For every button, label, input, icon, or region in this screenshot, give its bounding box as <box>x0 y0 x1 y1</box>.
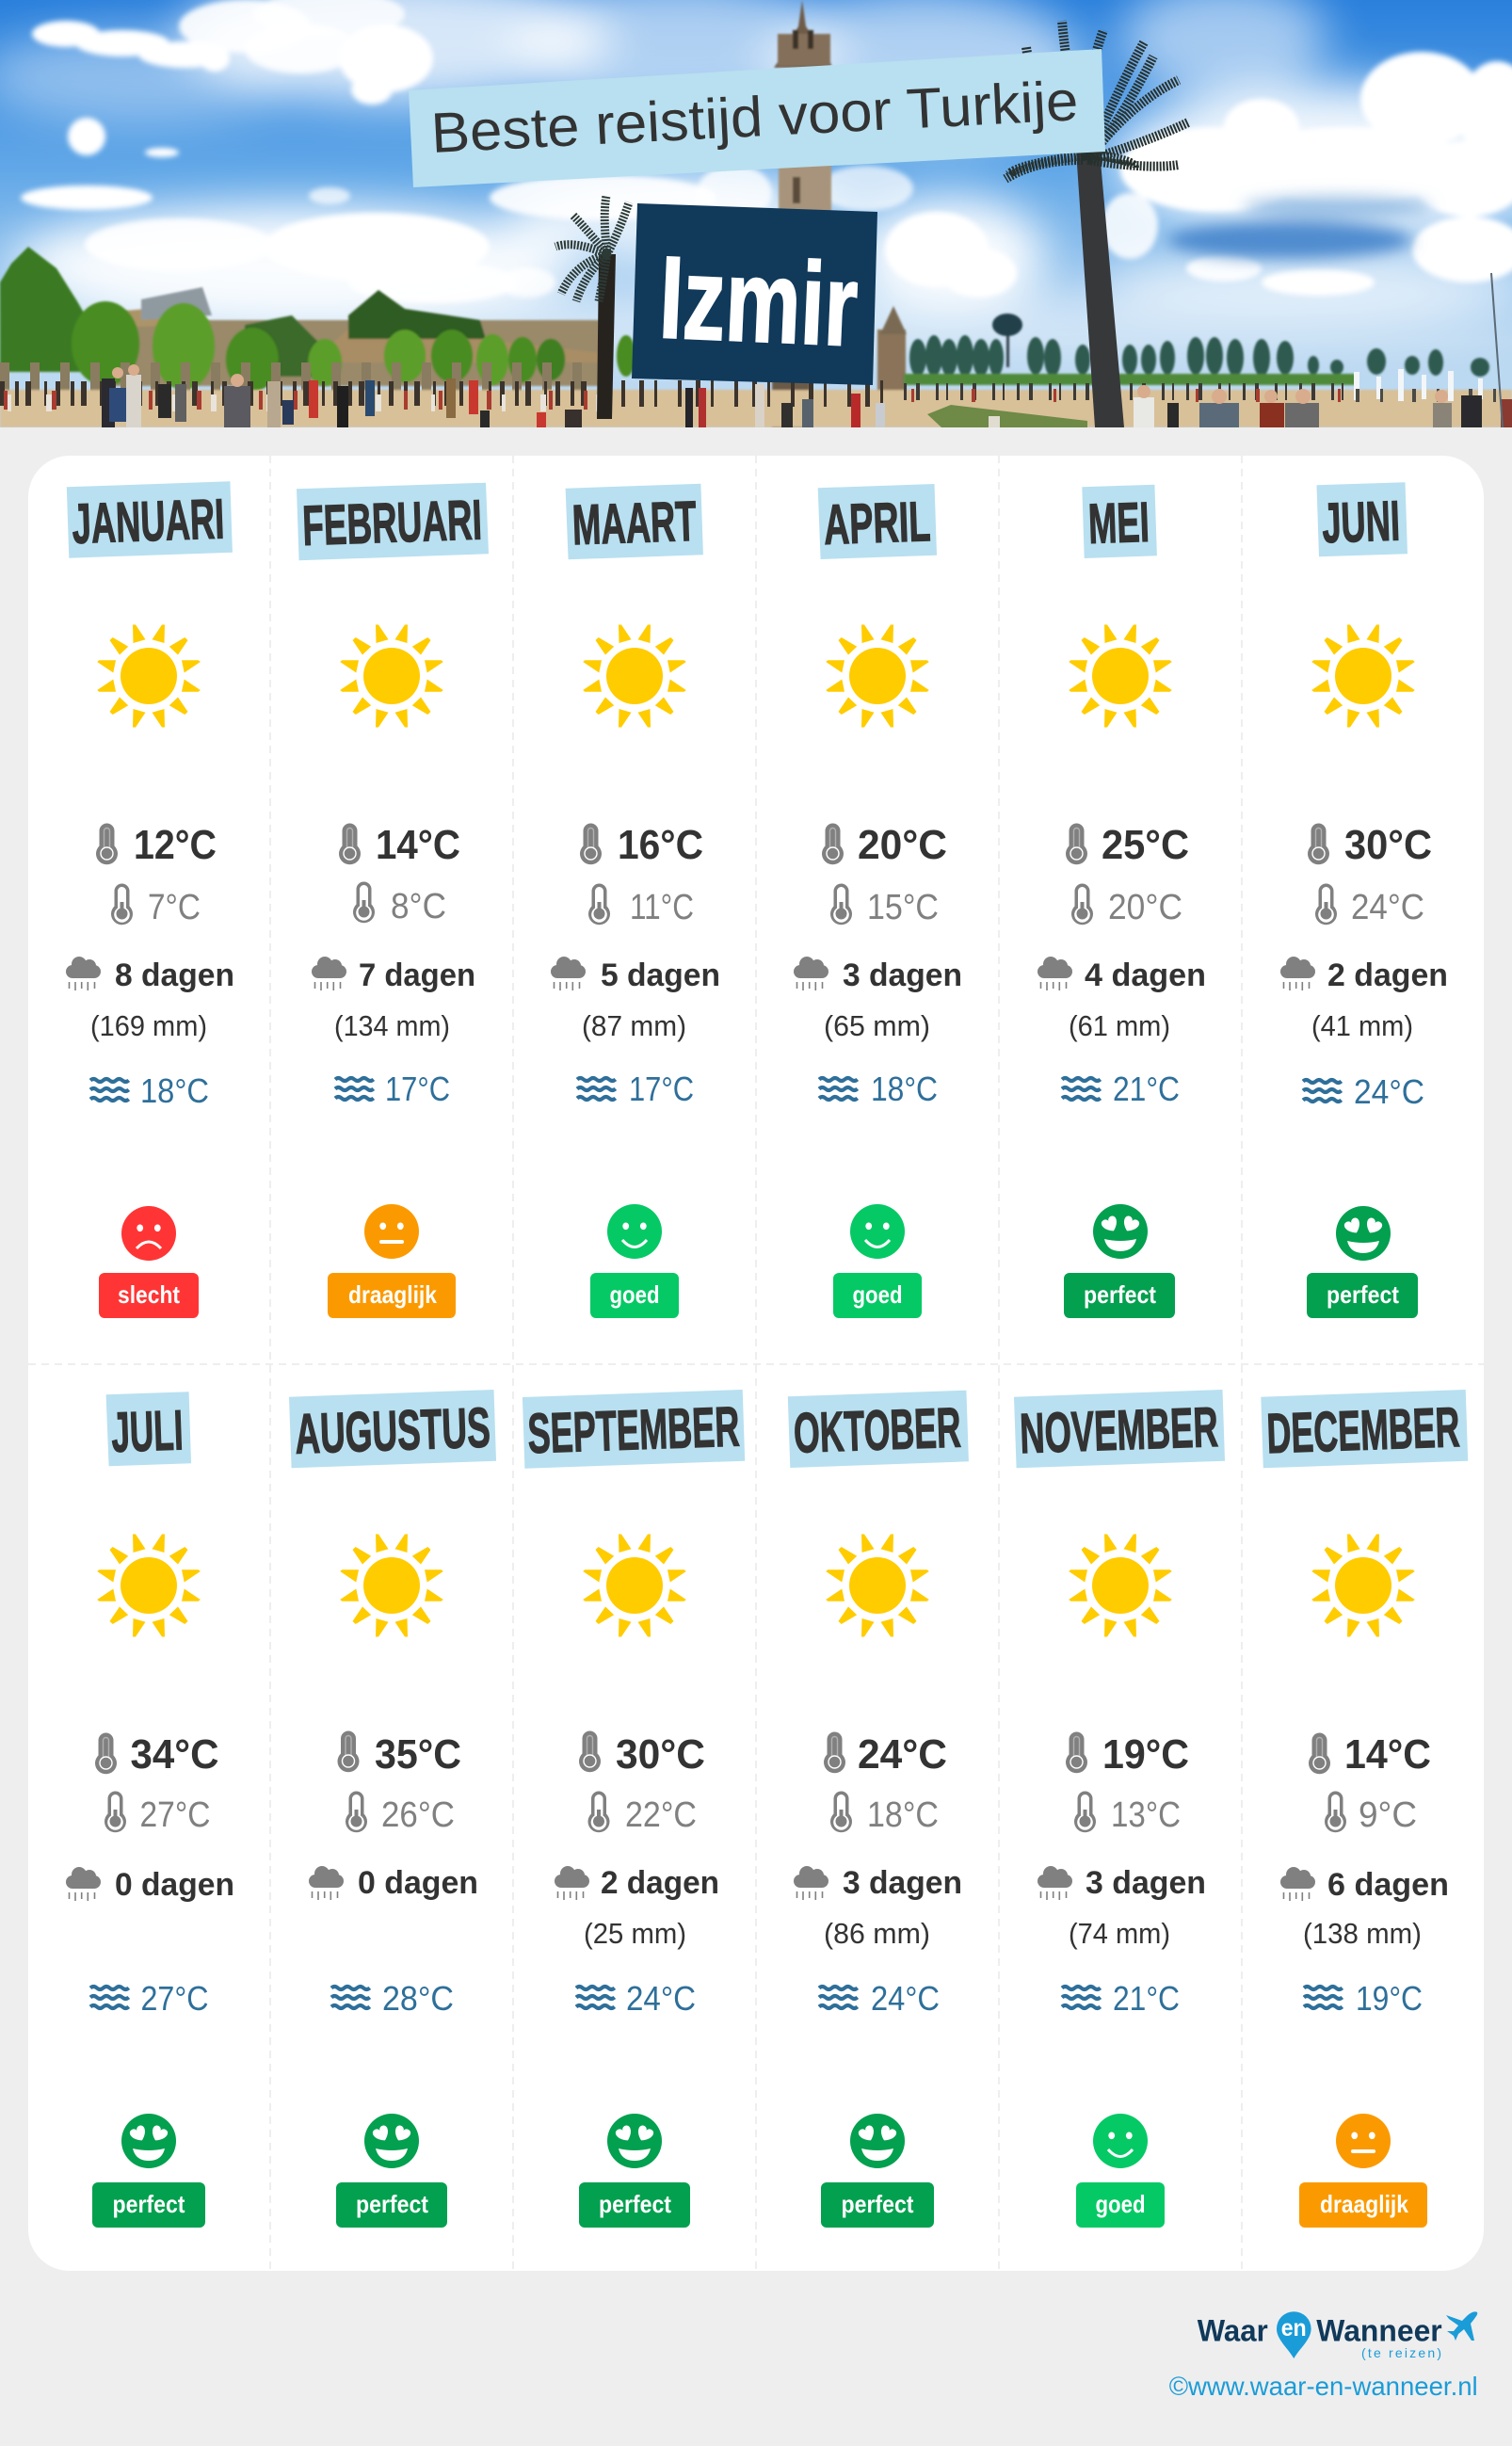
rating: perfect <box>1307 1206 1418 1318</box>
sea temperature: 27°C <box>141 1979 209 2018</box>
min temperature <box>1315 883 1424 927</box>
panel: september <box>523 1390 745 2228</box>
month label: juni <box>1316 482 1407 556</box>
rating: perfect: perfect <box>356 2190 428 2218</box>
min temperature <box>587 1791 697 1835</box>
panel: juli <box>66 1392 234 2228</box>
max temperature: 30°C <box>616 1731 705 1778</box>
month label: april: APRIL <box>823 490 931 556</box>
rain days: 0 dagen <box>115 1867 234 1903</box>
max temperature: 12°C <box>134 822 217 868</box>
month label: maart: MAART <box>571 490 698 556</box>
min temperature <box>830 883 939 927</box>
sea temperature: 18°C <box>140 1071 209 1110</box>
max temperature: 25°C <box>1102 822 1189 868</box>
rainfall: (86 mm) <box>824 1917 930 1950</box>
banner: title <box>409 49 1105 187</box>
rain days: 2 dagen <box>601 1865 719 1901</box>
sea temperature <box>1062 1979 1180 2018</box>
month label: november <box>1014 1390 1225 1468</box>
min temperature: 20°C <box>1108 888 1182 927</box>
max temperature <box>580 822 703 868</box>
panel: maart <box>551 484 720 1318</box>
icon: sun <box>1069 625 1172 727</box>
rating: perfect <box>92 2114 205 2228</box>
icon: plane <box>1446 2311 1477 2341</box>
logo: Waar en Wanneer <box>1198 2311 1477 2360</box>
min temperature: 7°C <box>148 888 201 927</box>
min temperature <box>1325 1791 1417 1835</box>
panel: februari <box>297 483 489 1318</box>
min temperature: 15°C <box>867 888 939 927</box>
rainfall: (169 mm) <box>90 1009 207 1042</box>
panel: calendar card <box>28 456 1484 2271</box>
max temperature: 24°C <box>858 1731 947 1778</box>
sea temperature <box>577 1070 694 1108</box>
rating: slecht: slecht <box>118 1280 180 1309</box>
rating: perfect <box>1064 1204 1175 1318</box>
icon: sun <box>97 1535 201 1636</box>
month label: mei <box>1082 485 1157 558</box>
min temperature: 11°C <box>630 888 694 927</box>
month label: juni: JUNI <box>1321 489 1401 555</box>
month label: februari: FEBRUARI <box>301 488 483 557</box>
sea temperature: 17°C <box>385 1070 450 1108</box>
icon: sun <box>1311 625 1415 727</box>
rain days: 2 dagen <box>1327 957 1448 993</box>
max temperature: 14°C <box>376 822 460 868</box>
min temperature <box>105 1791 211 1835</box>
panel: juni <box>1280 482 1448 1318</box>
sea temperature <box>819 1070 938 1108</box>
banner: city name <box>632 203 877 385</box>
month label: februari <box>297 483 489 560</box>
max temperature: 19°C <box>1102 1731 1189 1778</box>
rating: perfect <box>579 2114 690 2228</box>
max temperature <box>1066 1731 1189 1778</box>
rainfall: (134 mm) <box>334 1009 450 1042</box>
icon: map pin: en <box>1281 2315 1307 2341</box>
month label: januari: JANUARI <box>71 487 225 555</box>
min temperature: 13°C <box>1111 1795 1181 1835</box>
rain days: 3 dagen <box>1086 1865 1206 1901</box>
rain days: 5 dagen <box>601 957 720 993</box>
max temperature <box>579 1730 705 1778</box>
max temperature <box>339 822 460 868</box>
min temperature: 27°C <box>139 1795 211 1835</box>
sea temperature: 21°C <box>1113 1979 1180 2018</box>
sea temperature <box>1303 1072 1424 1111</box>
tagline: (te reizen) <box>1361 2345 1441 2360</box>
rain days: 0 dagen <box>358 1865 478 1901</box>
header photo: Izmir clock tower square <box>0 0 1512 427</box>
max temperature <box>1308 822 1432 868</box>
panel: mei <box>1037 485 1206 1318</box>
max temperature: 14°C <box>1344 1731 1431 1778</box>
rating: goed <box>590 1204 679 1318</box>
icon: map pin <box>1277 2311 1311 2358</box>
rain days <box>1037 957 1206 993</box>
sea temperature <box>1062 1070 1180 1108</box>
month label: juli <box>106 1392 191 1466</box>
rain days: 3 dagen <box>843 957 962 993</box>
rain days <box>551 957 720 993</box>
rain days <box>66 957 234 993</box>
rating: slecht <box>99 1206 199 1318</box>
icon: sun <box>1069 1535 1172 1636</box>
rainfall: (138 mm) <box>1303 1917 1422 1950</box>
month label: november: NOVEMBER <box>1019 1395 1219 1465</box>
min temperature: 8°C <box>391 887 446 926</box>
sea temperature <box>335 1070 450 1108</box>
min temperature <box>1074 1791 1181 1835</box>
month label: augustus: AUGUSTUS <box>294 1395 491 1466</box>
month label: augustus <box>289 1390 496 1468</box>
sea temperature <box>819 1979 940 2018</box>
rainfall: (61 mm) <box>1069 1009 1170 1042</box>
max temperature: 30°C <box>1344 822 1432 868</box>
icon: sun <box>583 625 686 727</box>
sea temperature <box>90 1979 209 2018</box>
max temperature <box>1066 822 1189 868</box>
sea temperature <box>1304 1979 1423 2018</box>
min temperature <box>111 883 201 927</box>
icon: sun <box>340 625 443 727</box>
rainfall: (65 mm) <box>824 1009 930 1042</box>
min temperature <box>353 881 446 926</box>
min temperature: 24°C <box>1351 888 1424 927</box>
min temperature <box>346 1791 455 1835</box>
sea temperature: 21°C <box>1113 1070 1180 1108</box>
title text: Beste reistijd voor Turkije <box>429 69 1080 165</box>
rating: perfect <box>821 2114 934 2228</box>
rain days: 7 dagen <box>359 957 475 993</box>
sea temperature: 24°C <box>871 1979 940 2018</box>
month label: juli: JULI <box>110 1398 185 1464</box>
rain days <box>794 957 962 993</box>
min temperature <box>1071 883 1182 927</box>
sea temperature: 19°C <box>1356 1979 1423 2018</box>
rating: perfect: perfect <box>113 2190 185 2218</box>
max temperature <box>96 822 217 868</box>
min temperature: 26°C <box>381 1795 455 1835</box>
rating: draaglijk: draaglijk <box>1320 2190 1408 2218</box>
rating: goed: goed <box>610 1280 659 1309</box>
month label: januari <box>67 481 233 558</box>
month label: maart <box>566 484 703 559</box>
panel: december <box>1261 1390 1468 2228</box>
max temperature <box>822 822 947 868</box>
max temperature: 34°C <box>130 1731 218 1778</box>
rating: draaglijk <box>328 1204 456 1318</box>
rating: perfect: perfect <box>599 2190 671 2218</box>
panel: oktober <box>788 1391 969 2228</box>
panel: augustus <box>289 1390 496 2228</box>
month label: september <box>523 1390 745 1469</box>
icon: sun <box>340 1535 443 1636</box>
rain days <box>312 957 475 993</box>
max temperature: 35°C <box>375 1731 461 1778</box>
panel: april <box>794 484 962 1318</box>
min temperature <box>830 1791 939 1835</box>
rainfall: (41 mm) <box>1311 1009 1413 1042</box>
rating: perfect <box>336 2114 447 2228</box>
min temperature: 22°C <box>625 1795 697 1835</box>
rating: goed: goed <box>1096 2190 1145 2218</box>
rating: draaglijk: draaglijk <box>348 1280 437 1309</box>
icon: sun <box>97 625 201 727</box>
logo: Waar en Wanneer: Wanneer <box>1316 2314 1442 2348</box>
min temperature: 9°C <box>1359 1795 1417 1835</box>
sea temperature: 17°C <box>629 1070 694 1108</box>
city name text: Izmir <box>657 233 861 371</box>
month label: oktober: OKTOBER <box>793 1396 962 1465</box>
icon: sun <box>826 1535 929 1636</box>
max temperature: 20°C <box>858 822 947 868</box>
website url: ©www.waar-en-wanneer.nl <box>1169 2372 1478 2401</box>
rating: goed: goed <box>853 1280 902 1309</box>
month label: oktober <box>788 1391 969 1468</box>
month label: september: SEPTEMBER <box>526 1394 741 1465</box>
min temperature <box>588 883 694 927</box>
icon: sun <box>583 1535 686 1636</box>
sea temperature <box>90 1071 209 1110</box>
sea temperature: 28°C <box>382 1979 454 2018</box>
rating: goed <box>1076 2114 1165 2228</box>
rain days: 4 dagen <box>1085 957 1206 993</box>
max temperature <box>337 1730 461 1778</box>
rainfall: (25 mm) <box>584 1917 686 1950</box>
icon: sun <box>826 625 929 727</box>
max temperature <box>1309 1731 1431 1778</box>
month label: mei: MEI <box>1087 491 1150 555</box>
min temperature: 18°C <box>867 1795 939 1835</box>
rating: draaglijk <box>1299 2114 1427 2228</box>
rating: perfect: perfect <box>842 2190 914 2218</box>
rainfall: (87 mm) <box>582 1009 686 1042</box>
rain days <box>1280 957 1448 993</box>
rain days: 6 dagen <box>1327 1867 1449 1903</box>
sea temperature <box>331 1979 454 2018</box>
rating: perfect: perfect <box>1327 1280 1399 1309</box>
rainfall: (74 mm) <box>1069 1917 1170 1950</box>
sea temperature: 18°C <box>871 1070 938 1108</box>
sea temperature <box>576 1979 696 2018</box>
rain days: 8 dagen <box>115 957 234 993</box>
month label: april <box>818 484 937 559</box>
panel: november <box>1014 1390 1225 2228</box>
sea temperature: 24°C <box>1354 1072 1424 1111</box>
max temperature: 16°C <box>618 822 703 868</box>
rain days: 3 dagen <box>843 1865 962 1901</box>
logo: Waar en Wanneer: Waar <box>1198 2314 1268 2348</box>
sea temperature: 24°C <box>626 1979 696 2018</box>
rating: perfect: perfect <box>1084 1280 1156 1309</box>
rating: goed <box>833 1204 922 1318</box>
panel: januari <box>66 481 234 1318</box>
max temperature <box>95 1731 218 1778</box>
icon: sun <box>1311 1535 1415 1636</box>
